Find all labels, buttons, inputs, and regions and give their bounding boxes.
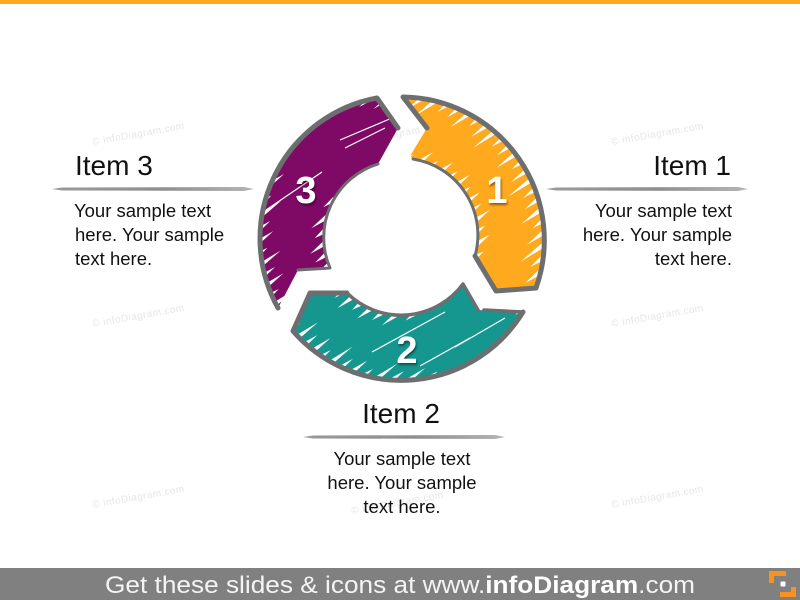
top accent bar [0,0,800,4]
item 2 heading: Item 2 [362,398,440,429]
item 3 body: text here. [75,248,152,269]
item 3 text block [52,150,254,269]
item 3 body: Your sample text [74,200,211,221]
segment 2 outline [293,284,523,380]
item 2 text block [303,398,505,517]
watermarks: © infoDiagram.com [611,303,704,330]
footer text: Get these slides & icons at www. infoDiagram .com [105,572,695,599]
item 3 body: here. Your sample [75,224,224,245]
item 1 body: Your sample text [595,200,732,221]
watermarks: © infoDiagram.com [92,303,185,330]
watermarks [92,121,704,517]
item 1 divider [546,187,748,191]
scribble hatching [205,46,595,430]
segment 1 outline [403,97,544,291]
item 3 divider [52,187,254,191]
watermarks: © infoDiagram.com [351,121,444,148]
watermarks: © infoDiagram.com [611,121,704,148]
item 2 body: Your sample text [333,448,471,469]
footer bar [0,568,800,600]
segment 1 fill [403,97,544,291]
segment 3 fill [260,98,398,308]
item 1 heading: Item 1 [653,150,731,181]
segment 3 outline [260,98,398,308]
item 2 body: here. Your sample [327,472,477,493]
number 1: 1 [486,170,508,212]
item 1 body: text here. [655,248,732,269]
segment 2 fill [293,284,523,380]
segment fills [260,97,544,380]
watermarks: © infoDiagram.com [611,484,704,511]
watermarks: © infoDiagram.com [92,121,185,148]
item 2 body: text here. [363,496,441,517]
long scribble slashes [266,118,505,366]
cycle diagram [205,46,595,430]
number 2: 2 [396,330,418,372]
item 1 body: here. Your sample [583,224,732,245]
item 3 heading: Item 3 [75,150,153,181]
item 1 text block [546,150,748,269]
number 3: 3 [295,170,317,212]
item 2 divider [303,435,505,439]
icon: infoDiagram logo [769,571,796,597]
watermarks: © infoDiagram.com [351,490,444,517]
watermarks: © infoDiagram.com [92,484,185,511]
